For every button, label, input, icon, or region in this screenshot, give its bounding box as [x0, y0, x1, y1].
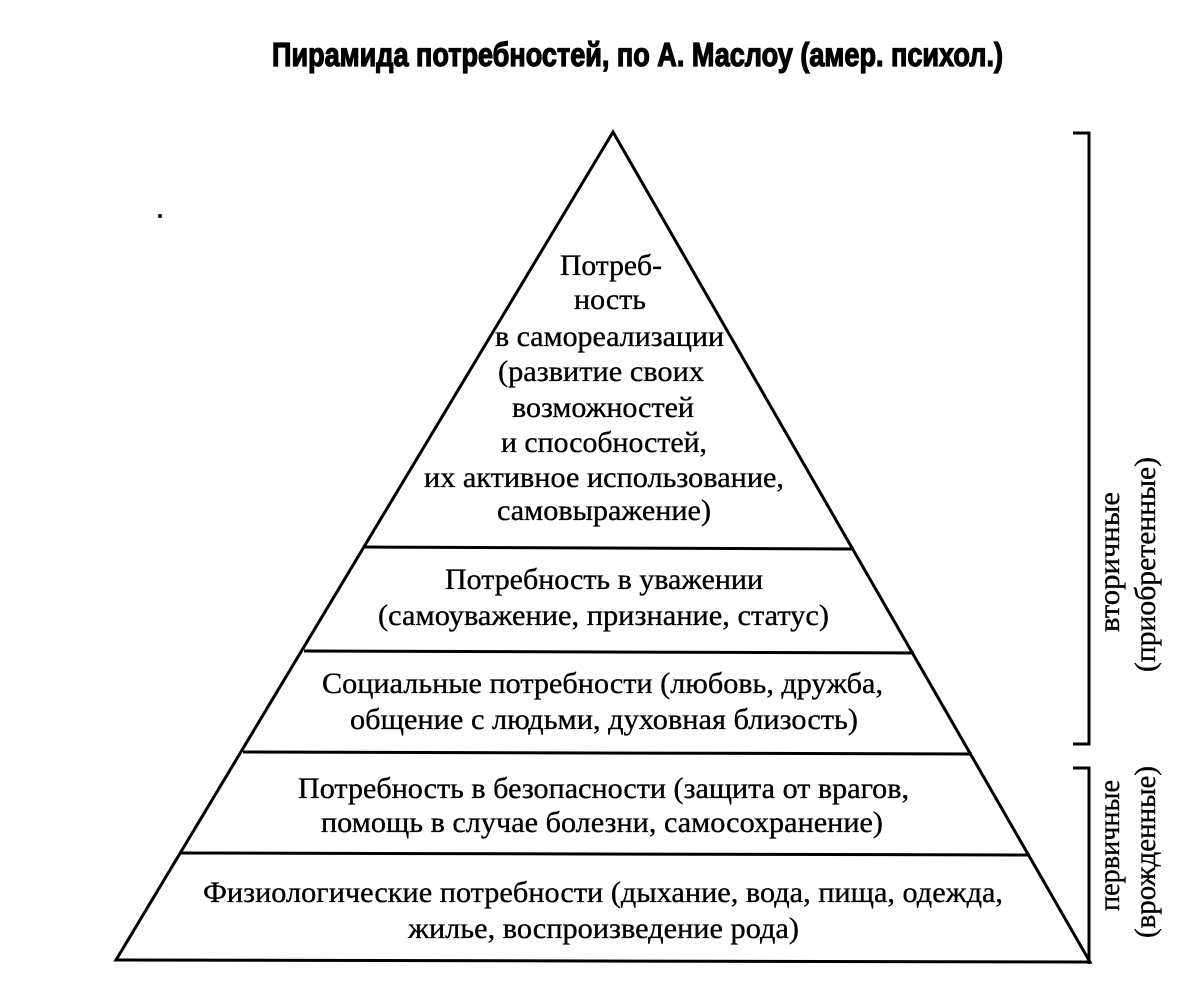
bracket: primary needs	[1073, 768, 1089, 964]
label: primary needs: (врожденные)	[1129, 766, 1162, 938]
bracket: secondary needs	[1073, 133, 1089, 744]
label: primary needs: первичные	[1093, 780, 1126, 911]
level: safety: помощь в случае болезни, самосохранение)	[321, 806, 883, 839]
label: primary needs	[1093, 766, 1162, 938]
pyramid outline	[116, 132, 1090, 962]
title: Пирамида потребностей, по А. Маслоу (амер. психол.)	[272, 36, 1003, 73]
level: self-actualization: в самореализации	[495, 320, 724, 353]
level: physiological: жилье, воспроизведение рода)	[407, 912, 799, 945]
level: safety	[298, 772, 909, 839]
level: social	[322, 667, 883, 736]
level: social: Социальные потребности (любовь, дружба,	[322, 667, 883, 700]
label: secondary needs: (приобретенные)	[1129, 457, 1162, 672]
level: self-actualization	[424, 249, 784, 527]
level: self-actualization: возможностей	[512, 391, 694, 424]
level: self-actualization: (развитие своих	[498, 355, 704, 388]
level: safety: Потребность в безопасности (защита от врагов,	[298, 772, 909, 805]
level: esteem: (самоуважение, признание, статус)	[378, 599, 829, 632]
level: physiological	[203, 876, 1003, 945]
level: self-actualization: их активное использование,	[424, 461, 784, 494]
label: secondary needs	[1093, 457, 1162, 672]
level: self-actualization: и способностей,	[501, 426, 707, 459]
level: self-actualization: ность	[574, 283, 646, 316]
level: social: общение с людьми, духовная близость)	[350, 703, 858, 736]
level: self-actualization: самовыражение)	[497, 494, 711, 527]
label: secondary needs: вторичные	[1093, 492, 1126, 632]
level: esteem: Потребность в уважении	[445, 563, 763, 596]
level: physiological: Физиологические потребности (дыхание, вода, пища, одежда,	[203, 876, 1003, 909]
stray dot	[158, 214, 162, 218]
level: esteem	[378, 563, 829, 632]
level: self-actualization: Потреб-	[560, 249, 662, 282]
